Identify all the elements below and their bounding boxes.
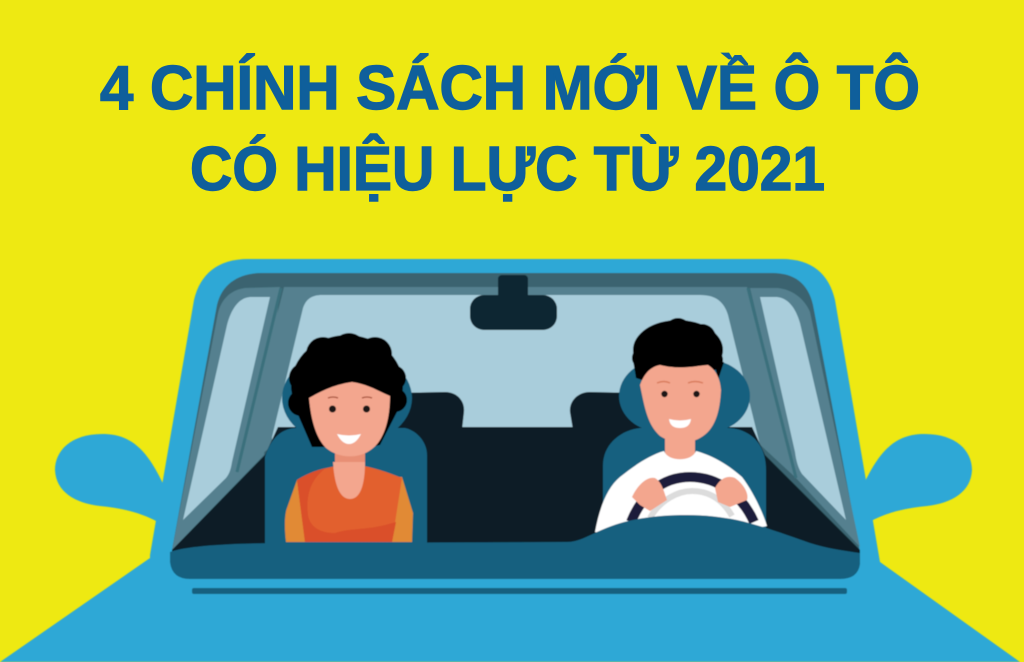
top <box>297 466 402 542</box>
face <box>640 365 721 443</box>
rear seat left <box>395 392 464 430</box>
left side mirror <box>55 434 166 522</box>
seat headrest <box>282 350 412 446</box>
mirror glass <box>470 295 557 330</box>
steering wheel hub <box>643 487 742 522</box>
smile <box>337 434 361 444</box>
left eye <box>661 391 668 397</box>
right hand <box>715 477 748 507</box>
right eye <box>363 406 370 412</box>
left pillar seam <box>237 288 281 472</box>
face <box>309 382 390 456</box>
rear seat right <box>570 392 640 430</box>
hair <box>288 333 407 447</box>
steering wheel rim <box>631 477 754 522</box>
eyebrows <box>328 397 372 398</box>
left eye <box>329 406 336 412</box>
title line 1: 4 CHÍNH SÁCH MỚI VỀ Ô TÔ <box>100 54 920 123</box>
car body <box>0 259 1020 662</box>
sleeves <box>285 477 413 542</box>
left side window glass <box>183 297 270 520</box>
rear-view mirror <box>470 275 557 330</box>
windshield pillars and top trim <box>238 287 796 478</box>
seat headrest <box>619 360 750 432</box>
right side window glass <box>760 297 846 520</box>
left hand <box>632 478 667 511</box>
smile <box>669 419 691 428</box>
right pillar seam <box>748 288 796 478</box>
passenger woman <box>265 333 427 545</box>
neck <box>665 435 695 462</box>
car illustration <box>0 259 1020 662</box>
cabin interior <box>172 427 860 560</box>
right side mirror <box>861 434 972 522</box>
neck <box>335 445 365 475</box>
dashboard <box>170 515 860 579</box>
shirt shadow <box>297 468 396 542</box>
eyebrows <box>657 382 703 383</box>
wheel shading <box>650 491 732 518</box>
driver man <box>595 318 767 540</box>
windshield glass <box>272 295 760 560</box>
title <box>100 54 920 204</box>
neckline <box>333 462 365 499</box>
right eye <box>693 391 700 397</box>
windshield frame <box>172 273 860 552</box>
seat back <box>603 428 766 540</box>
white shirt <box>595 451 767 540</box>
left side window frame <box>172 287 280 550</box>
right side window frame <box>750 288 860 547</box>
hood vent line <box>192 588 847 594</box>
seat back <box>265 428 427 545</box>
hair <box>632 318 724 380</box>
mirror stem <box>498 275 528 299</box>
title line 2: CÓ HIỆU LỰC TỪ 2021 <box>190 135 825 204</box>
